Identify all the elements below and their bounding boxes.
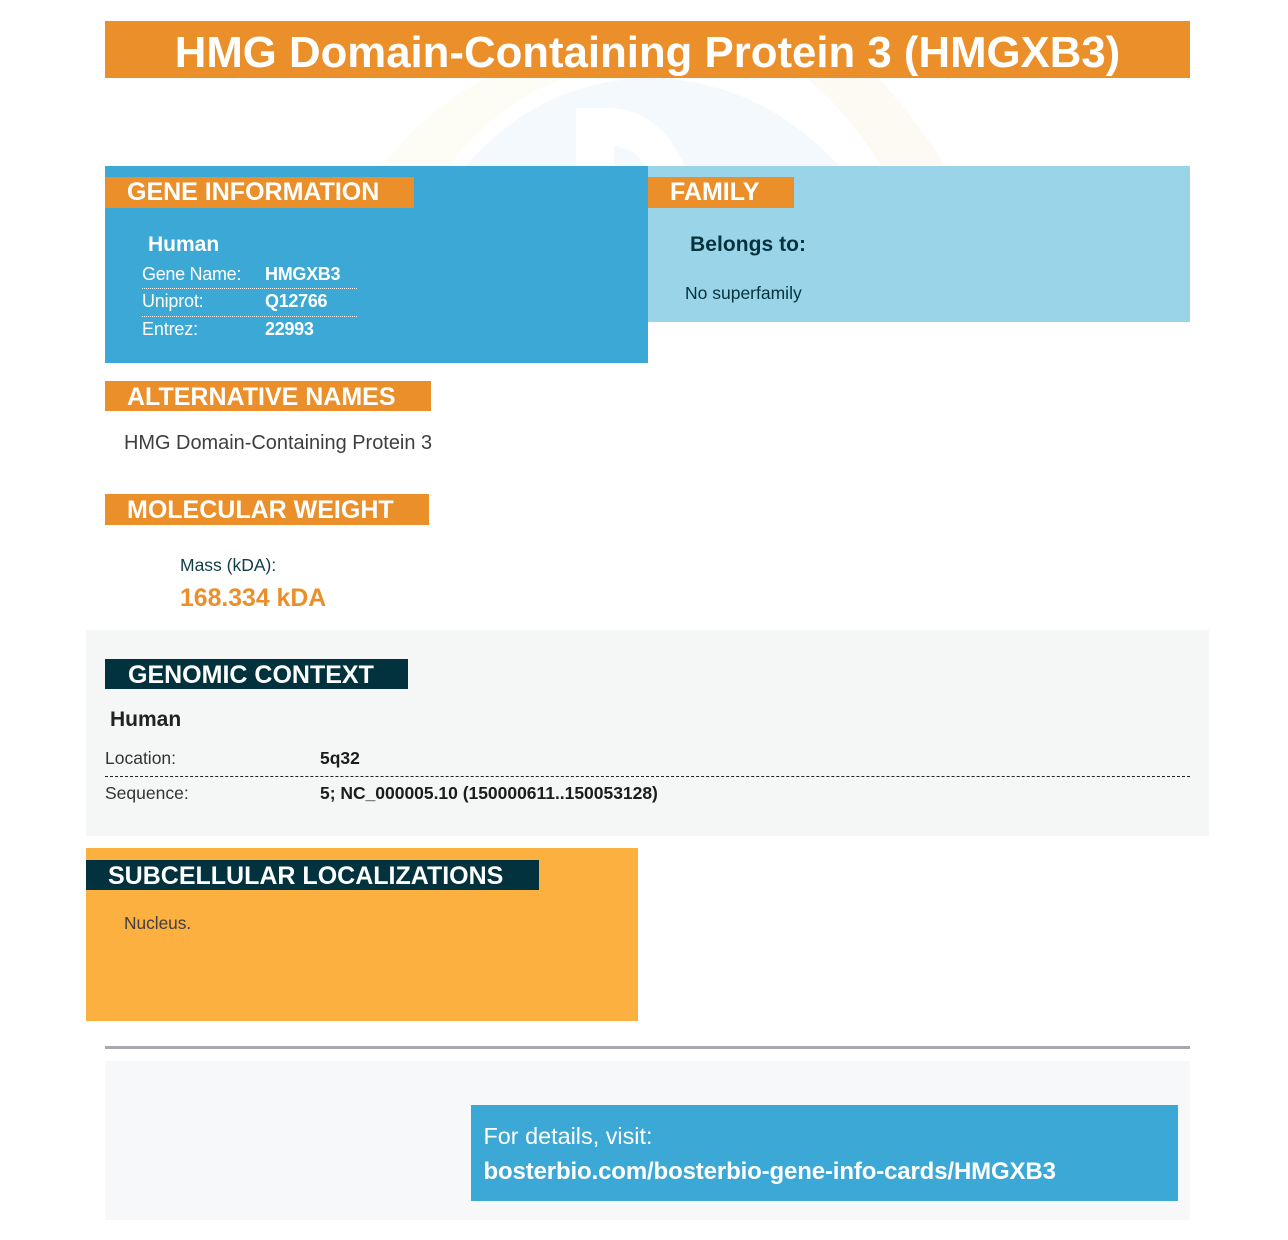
heading: gene information: GENE INFORMATION [127, 178, 379, 206]
callout label: For details, visit: [484, 1123, 652, 1149]
sequence row: Sequence: [105, 783, 189, 803]
alternative names text: HMG Domain-Containing Protein 3 [124, 432, 432, 454]
sequence row [105, 783, 658, 803]
gene name row [142, 264, 357, 289]
sequence row: 5; NC_000005.10 (150000611..150053128) [320, 783, 658, 803]
location row: 5q32 [320, 748, 360, 768]
gene name row: HMGXB3 [265, 264, 340, 284]
divider rule [105, 1046, 1190, 1049]
uniprot row: Q12766 [265, 291, 327, 311]
callout url: bosterbio.com/bosterbio-gene-info-cards/HMGXB3 [484, 1158, 1056, 1185]
entrez row [142, 319, 314, 339]
belongs to label: Belongs to: [690, 233, 806, 256]
localization text: Nucleus. [124, 913, 191, 933]
mass label: Mass (kDA): [180, 555, 276, 575]
callout: details link [471, 1105, 1178, 1201]
panel: genomic context [86, 630, 1209, 836]
heading: family [648, 177, 794, 208]
panel: family [648, 166, 1190, 322]
location row [105, 747, 1190, 777]
family text: No superfamily [685, 283, 802, 303]
entrez row: Entrez: [142, 319, 198, 339]
title: HMG Domain-Containing Protein 3 (HMGXB3) [175, 28, 1120, 77]
panel: subcellular localizations [86, 848, 638, 1021]
panel: gene information [105, 166, 648, 363]
heading: genomic context: GENOMIC CONTEXT [128, 661, 374, 689]
gene name row: Gene Name: [142, 264, 241, 284]
species label: Human [148, 233, 219, 256]
heading: molecular weight: MOLECULAR WEIGHT [127, 496, 394, 524]
entrez row: 22993 [265, 319, 314, 339]
heading: subcellular localizations: SUBCELLULAR LOCALIZATIONS [108, 862, 503, 890]
watermark logo [382, 78, 946, 166]
uniprot row: Uniprot: [142, 291, 203, 311]
species label: Human [110, 708, 181, 731]
mass value: 168.334 kDA [180, 585, 326, 612]
footer panel [105, 1061, 1190, 1220]
heading: alternative names: ALTERNATIVE NAMES [127, 383, 396, 411]
uniprot row [142, 291, 357, 317]
heading: family: FAMILY [670, 178, 759, 206]
location row: Location: [105, 748, 176, 768]
